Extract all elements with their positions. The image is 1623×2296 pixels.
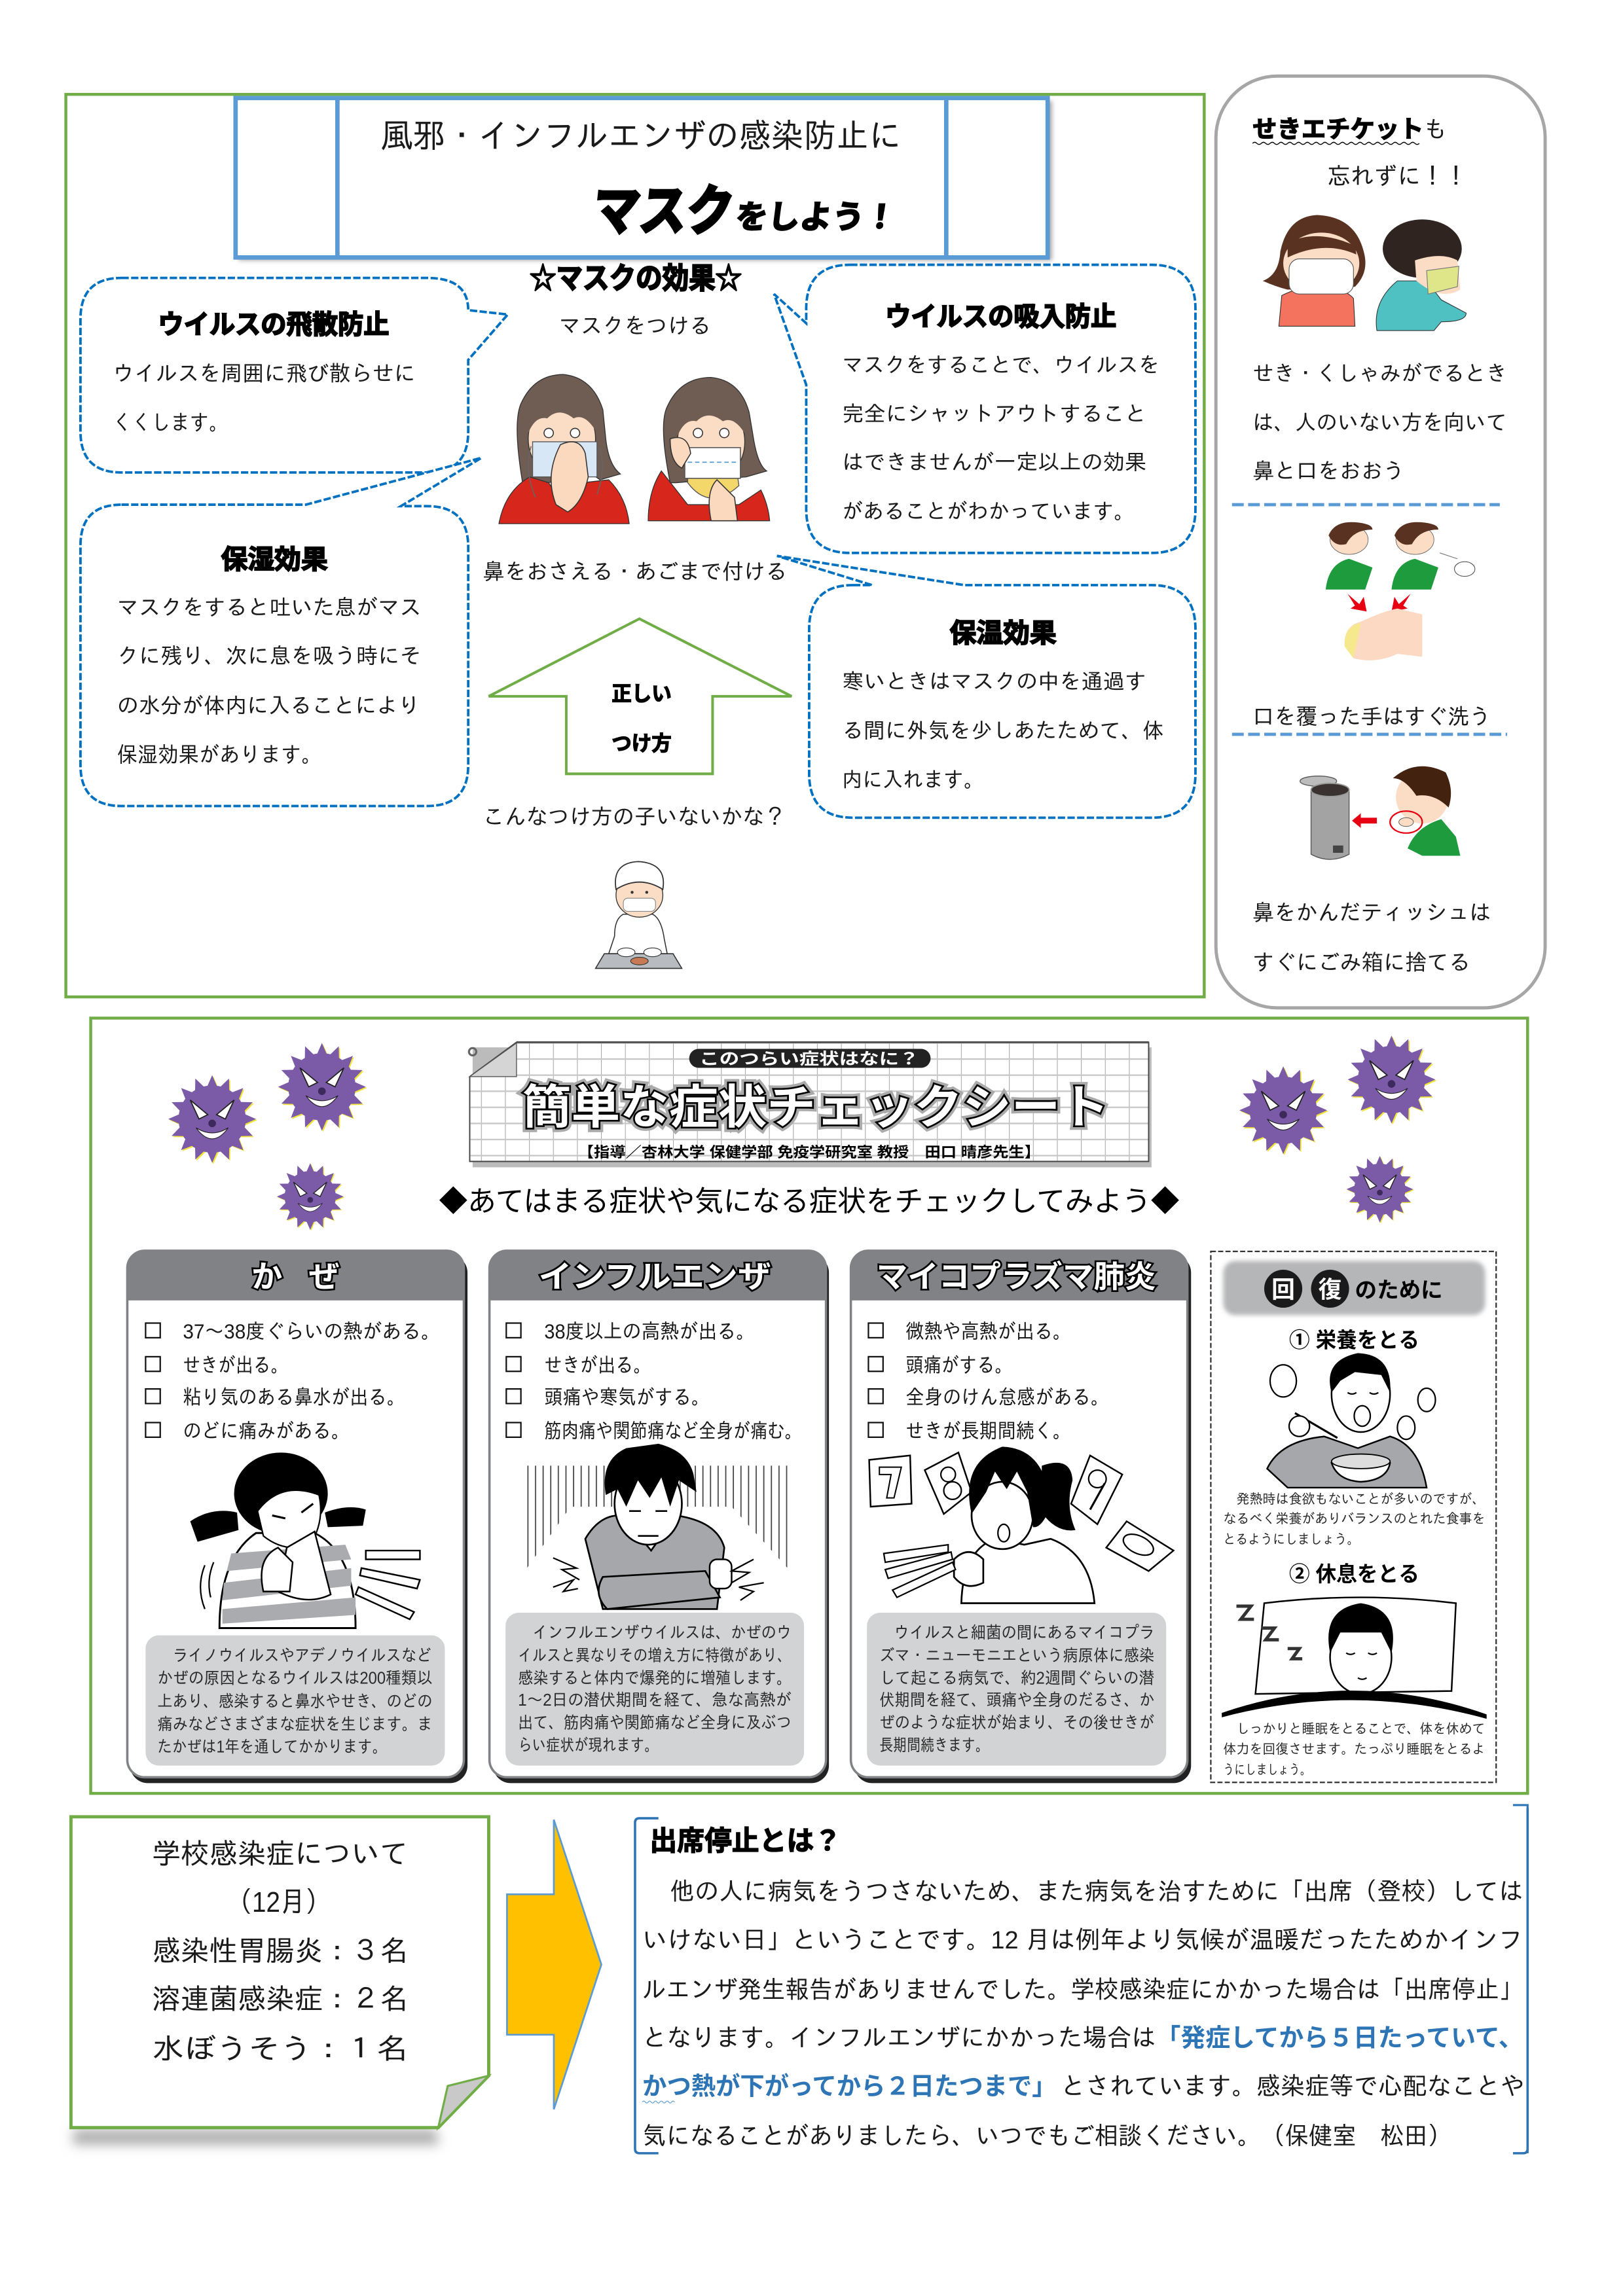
panel: attendance suspension bbox=[635, 1805, 1527, 2153]
text: nutrition advice: 発熱時は食欲もないことが多いのですが、 bbox=[1237, 1492, 1485, 1507]
checklist: 全身のけん怠感がある。 bbox=[905, 1386, 1109, 1409]
panel: attendance suspension: 気になることがありましたら、いつでもご相談ください。（保健室 松田） bbox=[642, 2123, 1451, 2150]
heading: for recovery bbox=[1223, 1261, 1485, 1315]
text: rest advice: うにしましょう。 bbox=[1223, 1763, 1311, 1778]
note: mycoplasma description: ぜのような症状が始まり、その後せきが bbox=[879, 1714, 1154, 1732]
arrow: yellow right arrow bbox=[507, 1820, 602, 2109]
checklist bbox=[868, 1320, 1109, 1443]
bubble: humidity effect: クに残り、次に息を吸う時にそ bbox=[117, 645, 422, 669]
bubble: droplet prevention: くくします。 bbox=[113, 411, 228, 435]
bubble: inhalation prevention: マスクをすることで、ウイルスを bbox=[842, 353, 1159, 377]
title box bbox=[236, 98, 1052, 260]
text: covering advice: せき・くしゃみがでるとき bbox=[1252, 362, 1507, 386]
panel: attendance suspension: 「発症してから５日たっていて、 bbox=[1156, 2025, 1523, 2053]
bubble: inhalation prevention: 完全にシャットアウトすること bbox=[842, 402, 1146, 426]
title box: をしよう！ bbox=[734, 200, 898, 236]
heading: cough etiquette: せきエチケット bbox=[1252, 116, 1424, 143]
text: throw tissues away bbox=[1252, 901, 1491, 975]
heading: mask effects: ☆マスクの効果☆ bbox=[530, 262, 742, 295]
illustration: boy eating soup bbox=[1267, 1353, 1435, 1488]
illustration: girl extending mask to chin bbox=[648, 378, 770, 521]
text: nutrition advice: なるべく栄養がありバランスのとれた食事を bbox=[1223, 1512, 1485, 1527]
illustration: masked girl and boy covering cough bbox=[1263, 215, 1466, 331]
checklist: 38度以上の高熱が出る。 bbox=[544, 1320, 755, 1343]
panel: attendance suspension: ルエンザ発生報告がありませんでした。学校感染症にかかった場合は「出席停止」 bbox=[642, 1977, 1523, 2004]
checklist: 微熱や高熱が出る。 bbox=[905, 1320, 1071, 1343]
title box: 風邪・インフルエンザの感染防止に bbox=[380, 117, 902, 155]
text: covering advice bbox=[1252, 362, 1507, 484]
text: rest advice: 体力を回復させます。たっぷり睡眠をとるよ bbox=[1223, 1742, 1485, 1757]
panel: attendance suspension: かつ熱が下がってから２日たつまで」 bbox=[642, 2073, 1057, 2100]
note: cold description: 痛みなどさまざまな症状を生じます。ま bbox=[157, 1715, 432, 1734]
card: influenza: インフルエンザ bbox=[538, 1260, 771, 1294]
illustration: lunch server in mask bbox=[596, 861, 682, 969]
bubble: inhalation prevention: はできませんが一定以上の効果 bbox=[842, 450, 1146, 474]
note: influenza description: 1～2日の潜伏期間を経て、急な高熱が bbox=[518, 1691, 792, 1710]
heading: instruction: ◆あてはまる症状や気になる症状をチェックしてみよう◆ bbox=[439, 1187, 1180, 1218]
checklist: 粘り気のある鼻水が出る。 bbox=[183, 1386, 405, 1409]
note: mycoplasma description: して起こる病気で、約2週間ぐらいの潜 bbox=[879, 1669, 1154, 1687]
bubble: warmth effect bbox=[777, 556, 1195, 817]
text: rest advice bbox=[1223, 1721, 1485, 1778]
text: rest advice: しっかりと睡眠をとることで、体を休めて bbox=[1237, 1721, 1485, 1736]
card: mycoplasma pneumonia: マイコプラズマ肺炎 bbox=[877, 1260, 1156, 1294]
checklist: のどに痛みがある。 bbox=[183, 1420, 350, 1443]
note: mycoplasma description: 長期間続きます。 bbox=[879, 1736, 989, 1755]
checklist: 頭痛がする。 bbox=[905, 1354, 1013, 1376]
heading: get rest: ② 休息をとる bbox=[1289, 1562, 1419, 1586]
illustration: coughing boys and hand washing bbox=[1326, 522, 1475, 660]
checklist bbox=[506, 1320, 802, 1443]
heading: cough etiquette: 忘れずに！！ bbox=[1327, 164, 1468, 190]
checklist: せきが長期間続く。 bbox=[905, 1420, 1071, 1443]
panel: cough etiquette bbox=[1216, 76, 1545, 1008]
arrow: correct way to wear: 正しい bbox=[611, 683, 672, 706]
text: covering advice: 鼻と口をおおう bbox=[1252, 459, 1405, 484]
note: influenza description bbox=[505, 1613, 804, 1766]
bubble: humidity effect: マスクをすると吐いた息がマス bbox=[117, 596, 422, 620]
note: cold description: たかぜは1年を通してかかります。 bbox=[157, 1738, 387, 1756]
note: influenza description: インフルエンザウイルスは、かぜのウ bbox=[533, 1624, 792, 1642]
arrow: correct way to wear: つけ方 bbox=[611, 732, 672, 755]
panel: mask infection prevention bbox=[66, 94, 1204, 997]
arrow: correct way to wear bbox=[488, 619, 792, 774]
text: throw tissues away: すぐにごみ箱に捨てる bbox=[1252, 951, 1470, 975]
note: mycoplasma description bbox=[867, 1613, 1166, 1766]
panel: attendance suspension: となります。インフルエンザにかかった場合は bbox=[642, 2025, 1156, 2053]
panel: school infectious disease counts: 水ぼうそう：１名 bbox=[152, 2034, 409, 2066]
bubble: warmth effect: 寒いときはマスクの中を通過す bbox=[842, 670, 1146, 694]
bubble: droplet prevention: ウイルスの飛散防止 bbox=[158, 310, 389, 340]
bubble: warmth effect: 保温効果 bbox=[949, 619, 1057, 648]
bubble: humidity effect: 保湿効果があります。 bbox=[117, 743, 322, 767]
panel: school infectious disease counts: 感染性胃腸炎：３名 bbox=[152, 1936, 409, 1967]
panel: symptom check sheet bbox=[91, 1018, 1527, 1793]
note: influenza description: 感染すると体内で爆発的に増殖します。 bbox=[518, 1669, 792, 1687]
heading: for recovery: のために bbox=[1355, 1278, 1443, 1302]
bubble: warmth effect: る間に外気を少しあたためて、体 bbox=[842, 719, 1164, 743]
bubble: inhalation prevention: があることがわかっています。 bbox=[842, 499, 1135, 523]
panel: attendance suspension: 出席停止とは？ bbox=[649, 1825, 841, 1856]
illustration: trash can and boy bbox=[1300, 766, 1460, 859]
text: put on mask: マスクをつける bbox=[559, 315, 711, 339]
illustration: girl pressing mask on nose bbox=[499, 374, 629, 524]
title box: マスク bbox=[590, 181, 737, 242]
panel: for recovery bbox=[1211, 1251, 1496, 1782]
note: mycoplasma description: ウイルスと細菌の間にあるマイコプラ bbox=[894, 1623, 1154, 1642]
panel: attendance suspension: とされています。感染症等で心配なことや bbox=[1061, 2073, 1525, 2100]
bubble: humidity effect: の水分が体内に入ることにより bbox=[117, 694, 420, 719]
card: influenza bbox=[490, 1251, 829, 1783]
bubble: inhalation prevention: ウイルスの吸入防止 bbox=[885, 302, 1116, 331]
text: covering advice: は、人のいない方を向いて bbox=[1252, 411, 1507, 435]
note: cold description bbox=[145, 1636, 445, 1766]
panel: attendance suspension: いけない日」ということです。12 月は例年より気候が温暖だったためかインフ bbox=[642, 1927, 1523, 1954]
bubble: inhalation prevention bbox=[774, 265, 1195, 553]
text: nutrition advice bbox=[1223, 1492, 1485, 1547]
header: check sheet title: 【指導／杏林大学 保健学部 免疫学研究室 教授 田口 晴彦先生】 bbox=[578, 1144, 1040, 1160]
text: nutrition advice: とるようにしましょう。 bbox=[1223, 1532, 1359, 1547]
header: check sheet title: このつらい症状はなに？ bbox=[699, 1050, 919, 1068]
text: any kids wearing it like this: こんなつけ方の子いないかな？ bbox=[483, 805, 786, 829]
checklist: 頭痛や寒気がする。 bbox=[544, 1386, 710, 1409]
bubble: droplet prevention: ウイルスを周囲に飛び散らせに bbox=[113, 362, 416, 386]
note: influenza description: イルスと異なりその増え方に特徴があり、 bbox=[518, 1647, 792, 1665]
heading: cough etiquette bbox=[1252, 116, 1468, 190]
bubble: humidity effect bbox=[81, 458, 481, 806]
checklist: せきが出る。 bbox=[183, 1354, 288, 1376]
card: mycoplasma pneumonia bbox=[851, 1251, 1191, 1783]
note: cold description: ライノウイルスやアデノウイルスなど bbox=[173, 1647, 431, 1665]
checklist bbox=[145, 1320, 441, 1443]
header: check sheet title: 簡単な症状チェックシート bbox=[522, 1081, 1109, 1134]
text: throw tissues away: 鼻をかんだティッシュは bbox=[1252, 901, 1491, 925]
icon: viruses left bbox=[168, 1043, 367, 1231]
header: check sheet title bbox=[469, 1042, 1152, 1168]
text: press nose, cover chin: 鼻をおさえる・あごまで付ける bbox=[483, 560, 787, 584]
note: influenza description: らい症状が現れます。 bbox=[518, 1736, 659, 1755]
bubble: humidity effect: 保湿効果 bbox=[221, 545, 328, 574]
note: cold description: 上あり、感染すると鼻水やせき、のどの bbox=[157, 1693, 432, 1711]
heading: for recovery: 復 bbox=[1319, 1276, 1342, 1302]
bubble: warmth effect: 内に入れます。 bbox=[842, 767, 984, 791]
card: common cold bbox=[127, 1251, 467, 1783]
panel: attendance suspension: 他の人に病気をうつさないため、また病気を治すために「出席（登校）しては bbox=[670, 1878, 1523, 1906]
panel: school infectious disease counts: （12月） bbox=[227, 1887, 331, 1918]
illustration: girl blowing nose bbox=[191, 1452, 420, 1628]
checklist: 37～38度ぐらいの熱がある。 bbox=[183, 1320, 441, 1343]
panel: school infectious disease counts: 学校感染症について bbox=[152, 1839, 409, 1870]
heading: cough etiquette: も bbox=[1424, 117, 1447, 143]
illustration: coughing girl with fever numbers bbox=[869, 1446, 1173, 1604]
checklist: 筋肉痛や関節痛など全身が痛む。 bbox=[544, 1420, 802, 1443]
card: common cold: かぜ bbox=[251, 1260, 340, 1294]
icon: viruses right bbox=[1239, 1035, 1436, 1223]
illustration: sleeping boy bbox=[1222, 1598, 1487, 1719]
illustration: shivering man bbox=[524, 1444, 792, 1609]
note: mycoplasma description: 伏期間を経て、頭痛や全身のだるさ、か bbox=[879, 1691, 1154, 1710]
panel: school infectious disease counts: 溶連菌感染症：２名 bbox=[152, 1984, 409, 2016]
checklist: せきが出る。 bbox=[544, 1354, 651, 1376]
note: cold description: かぜの原因となるウイルスは200種類以 bbox=[157, 1669, 432, 1687]
bubble: droplet prevention bbox=[81, 278, 508, 473]
note: influenza description: 出て、筋肉痛や関節痛など全身に及ぶつ bbox=[518, 1714, 792, 1732]
heading: for recovery: 回 bbox=[1271, 1276, 1295, 1302]
heading: eat nutrition: ① 栄養をとる bbox=[1289, 1328, 1419, 1352]
note: mycoplasma description: ズマ・ニューモニエという病原体に感染 bbox=[879, 1647, 1154, 1665]
header: check sheet title: 簡単な症状チェックシート bbox=[522, 1081, 1109, 1134]
text: wash hands: 口を覆った手はすぐ洗う bbox=[1252, 705, 1491, 729]
panel: school infectious disease counts bbox=[71, 1817, 488, 2144]
